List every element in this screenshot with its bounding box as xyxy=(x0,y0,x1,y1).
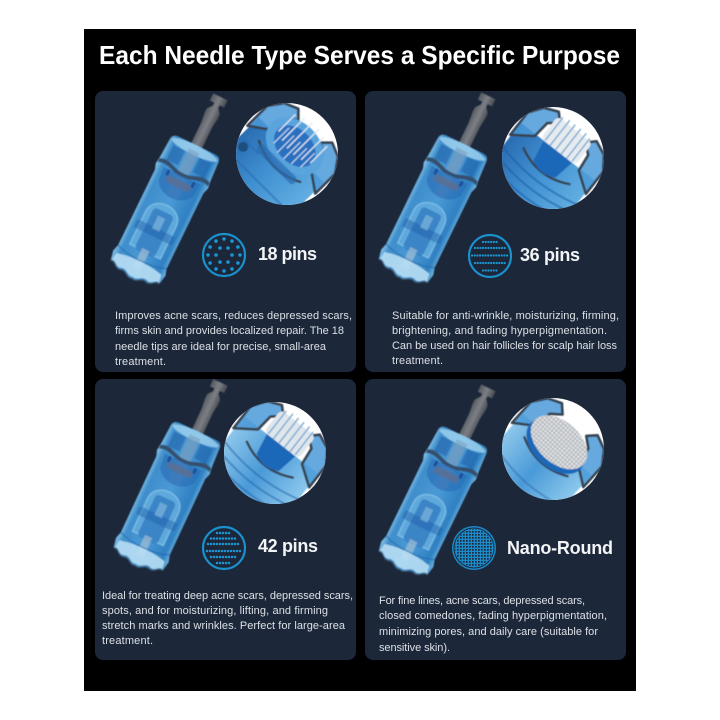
description: 42 pins: stretch marks and wrinkles. Perfect for large-area xyxy=(102,620,346,632)
panel: Nano-Round xyxy=(365,375,626,660)
panel: 42 pins xyxy=(95,370,356,660)
label: 18 pins: 18 pins xyxy=(258,244,317,264)
label: Nano-Round: Nano-Round xyxy=(507,538,613,558)
description: 18 pins: needle tips are ideal for precise, small-area xyxy=(115,341,327,353)
description: Nano-Round: minimizing pores, and daily care (suitable for xyxy=(379,626,598,638)
description: 42 pins: Ideal for treating deep acne scars, depressed scars, xyxy=(102,590,353,602)
description: 18 pins: Improves acne scars, reduces depressed scars, xyxy=(115,310,352,322)
description: 36 pins: Can be used on hair follicles for scalp hair loss xyxy=(392,340,618,352)
cartridge illustration xyxy=(106,84,246,291)
icon: nano-round pattern xyxy=(452,526,496,570)
black background card xyxy=(84,29,636,691)
magnified tip: Nano-Round xyxy=(502,398,604,500)
panel: 36 pins xyxy=(365,83,626,372)
icon: 18 pin pattern xyxy=(203,234,245,276)
description: 42 pins xyxy=(102,590,353,647)
description: 42 pins: treatment. xyxy=(102,635,153,647)
description: 42 pins: spots, and for moisturizing, lifting, and firming xyxy=(102,605,328,617)
description: 18 pins: firms skin and provides localized repair. The 18 xyxy=(115,325,344,337)
description: Nano-Round: For fine lines, acne scars, depressed scars, xyxy=(379,595,585,607)
description: 36 pins xyxy=(392,310,619,367)
cartridge illustration xyxy=(109,370,247,578)
description: 36 pins: brightening, and fading hyperpigmentation. xyxy=(392,325,607,337)
description: Nano-Round xyxy=(379,595,607,654)
magnified tip: 36 pins xyxy=(502,107,604,209)
description: 36 pins: Suitable for anti-wrinkle, moisturizing, firming, xyxy=(392,310,619,322)
label: 42 pins: 42 pins xyxy=(258,536,318,556)
icon: 36 pin pattern xyxy=(469,235,511,277)
magnified tip: 18 pins xyxy=(236,103,338,205)
cartridge illustration xyxy=(374,83,514,290)
panel: 18 pins xyxy=(95,84,356,372)
description: Nano-Round: closed comedones, fading hyperpigmentation, xyxy=(379,610,607,622)
description: Nano-Round: sensitive skin). xyxy=(379,642,450,654)
cartridge illustration xyxy=(374,375,514,582)
icon: 42 pin pattern xyxy=(203,527,245,569)
magnified tip: 42 pins xyxy=(224,402,326,504)
description: 18 pins: treatment. xyxy=(115,356,166,368)
description: 36 pins: treatment. xyxy=(392,355,443,367)
description: 18 pins xyxy=(115,310,352,368)
label: 36 pins: 36 pins xyxy=(520,245,580,265)
title: Each Needle Type Serves a Specific Purpose xyxy=(99,40,620,70)
